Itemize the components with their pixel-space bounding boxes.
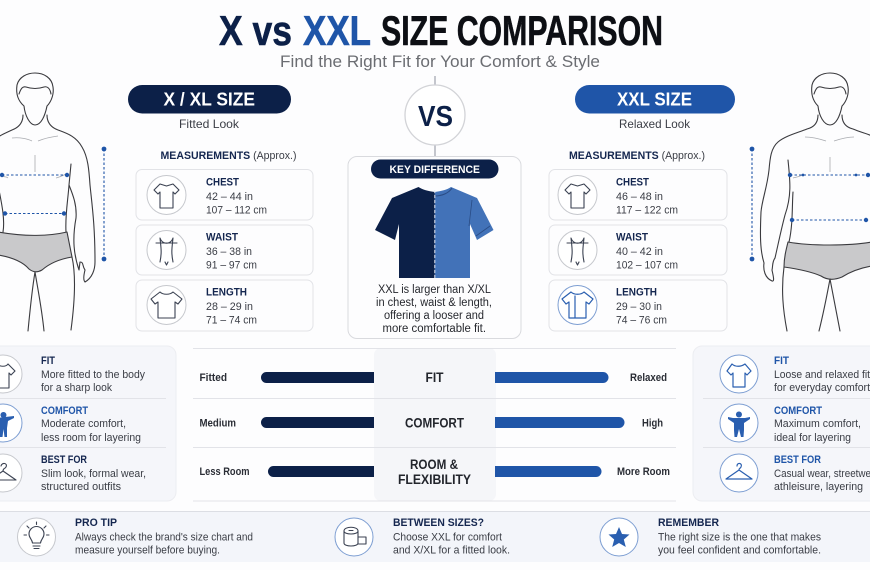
tip: between sizes: and X/XL for a fitted look. <box>393 544 510 556</box>
card: left waist: 91 – 97 cm <box>206 260 257 272</box>
key difference text: more comfortable fit. <box>382 323 486 335</box>
detail: moderate comfort: COMFORT <box>41 405 88 417</box>
detail: maximum comfort: COMFORT <box>774 405 822 417</box>
panel: left details <box>0 346 176 501</box>
tip: between sizes: Choose XXL for comfort <box>393 532 502 544</box>
card: left length: 28 – 29 in <box>206 301 253 313</box>
title: X vs <box>219 7 292 54</box>
key difference label: KEY DIFFERENCE <box>390 164 480 176</box>
panel: left measurement cards <box>136 170 313 331</box>
panel: bottom tips <box>0 512 870 562</box>
detail: right best for <box>720 454 870 493</box>
card: left length <box>136 280 313 331</box>
figure: right relaxed man <box>750 73 870 331</box>
row: room and flexibility: Less Room <box>200 466 250 478</box>
title: XXL <box>303 7 371 54</box>
badge: X / XL size: X / XL SIZE <box>164 90 255 110</box>
card: left chest: 42 – 44 in <box>206 191 253 203</box>
row: room and flexibility: More Room <box>617 466 670 478</box>
tip: between sizes <box>335 517 510 556</box>
tip: pro tip: Always check the brand's size chart and <box>75 532 253 544</box>
tip: between sizes: BETWEEN SIZES? <box>393 517 484 529</box>
row: fit: Relaxed <box>630 372 667 384</box>
detail: maximum comfort: ideal for layering <box>774 432 851 444</box>
comparison chart <box>193 348 676 501</box>
card: right length: 29 – 30 in <box>616 301 662 313</box>
card: left length: LENGTH <box>206 286 247 298</box>
card: left waist: 36 – 38 in <box>206 246 252 258</box>
panel: right details <box>693 346 870 501</box>
detail: moderate comfort: less room for layering <box>41 432 141 444</box>
title: SIZE COMPARISON <box>381 7 663 54</box>
row: room and flexibility <box>200 457 670 487</box>
row: comfort: High <box>642 418 663 430</box>
tip: pro tip: measure yourself before buying. <box>75 544 220 556</box>
key difference text: XXL is larger than X/XL <box>378 284 492 296</box>
badge: XXL size: XXL SIZE <box>617 90 692 110</box>
card: left length: 71 – 74 cm <box>206 314 257 326</box>
card: right waist <box>549 225 727 275</box>
key difference text: offering a looser and <box>384 310 484 322</box>
detail: fitted fit: More fitted to the body <box>41 369 145 381</box>
card: right length: LENGTH <box>616 286 657 298</box>
tip: remember: you feel confident and comfortable. <box>658 544 821 556</box>
tip: pro tip: PRO TIP <box>75 517 117 529</box>
card: right chest: 46 – 48 in <box>616 191 663 203</box>
card: right chest: CHEST <box>616 176 649 188</box>
card: right waist: 40 – 42 in <box>616 246 663 258</box>
row: fit <box>200 370 667 385</box>
card: right chest: 117 – 122 cm <box>616 204 678 216</box>
subtitle: Find the Right Fit for Your Comfort & Style <box>280 52 600 71</box>
detail: left best for: structured outfits <box>41 481 121 493</box>
detail: right best for: athleisure, layering <box>774 481 863 493</box>
heading: left measurements: MEASUREMENTS (Approx.) <box>160 150 296 162</box>
title <box>219 7 663 54</box>
badge: X / XL size <box>128 85 291 114</box>
measure lines: left figure <box>0 147 106 261</box>
card: right waist: WAIST <box>616 232 648 244</box>
detail: left best for <box>0 454 146 493</box>
key difference label <box>371 160 498 178</box>
panel: right measurement cards <box>549 170 727 331</box>
detail: left best for: Slim look, formal wear, <box>41 468 146 480</box>
tip: remember: The right size is the one that makes <box>658 532 821 544</box>
VS badge <box>405 76 465 156</box>
detail: left best for: BEST FOR <box>41 454 87 466</box>
detail: maximum comfort <box>720 404 861 444</box>
figure: left fitted man <box>0 73 106 331</box>
detail: maximum comfort: Maximum comfort, <box>774 418 861 430</box>
card: left waist <box>136 225 313 275</box>
key difference text <box>376 284 492 335</box>
measure lines: right figure <box>750 147 870 261</box>
detail: relaxed fit <box>720 355 870 394</box>
tip: remember: REMEMBER <box>658 517 719 529</box>
detail: relaxed fit: FIT <box>774 355 789 367</box>
card: left chest: CHEST <box>206 176 239 188</box>
card: right length <box>549 280 727 331</box>
icon: two-tone t-shirt <box>375 187 494 278</box>
heading: right measurements: MEASUREMENTS (Approx.) <box>569 150 705 162</box>
detail: fitted fit: FIT <box>41 355 55 367</box>
row: comfort <box>200 416 663 430</box>
card: left chest <box>136 170 313 220</box>
detail: moderate comfort <box>0 404 141 444</box>
row: room and flexibility: ROOM & <box>410 457 458 472</box>
chart center column <box>374 348 496 501</box>
row: comfort: COMFORT <box>405 416 465 430</box>
row: comfort: Medium <box>200 418 236 430</box>
VS badge: VS <box>418 101 453 133</box>
card: right waist: 102 – 107 cm <box>616 260 678 272</box>
detail: fitted fit: for a sharp look <box>41 382 112 394</box>
card: left chest: 107 – 112 cm <box>206 204 267 216</box>
detail: right best for: BEST FOR <box>774 454 821 466</box>
card: right chest <box>549 170 727 220</box>
row: fit: Fitted <box>200 372 227 384</box>
card: left waist: WAIST <box>206 232 238 244</box>
key difference text: in chest, waist & length, <box>376 297 492 309</box>
caption: fitted look: Fitted Look <box>179 117 240 131</box>
detail: moderate comfort: Moderate comfort, <box>41 418 126 430</box>
badge: XXL size <box>575 85 735 114</box>
tip: pro tip <box>18 517 253 556</box>
tip: remember <box>600 517 821 556</box>
card: right length: 74 – 76 cm <box>616 314 667 326</box>
row: room and flexibility: FLEXIBILITY <box>398 472 471 487</box>
panel: key difference <box>348 156 521 338</box>
caption: relaxed look: Relaxed Look <box>619 117 691 131</box>
detail: fitted fit <box>0 355 145 394</box>
row: fit: FIT <box>426 370 444 385</box>
